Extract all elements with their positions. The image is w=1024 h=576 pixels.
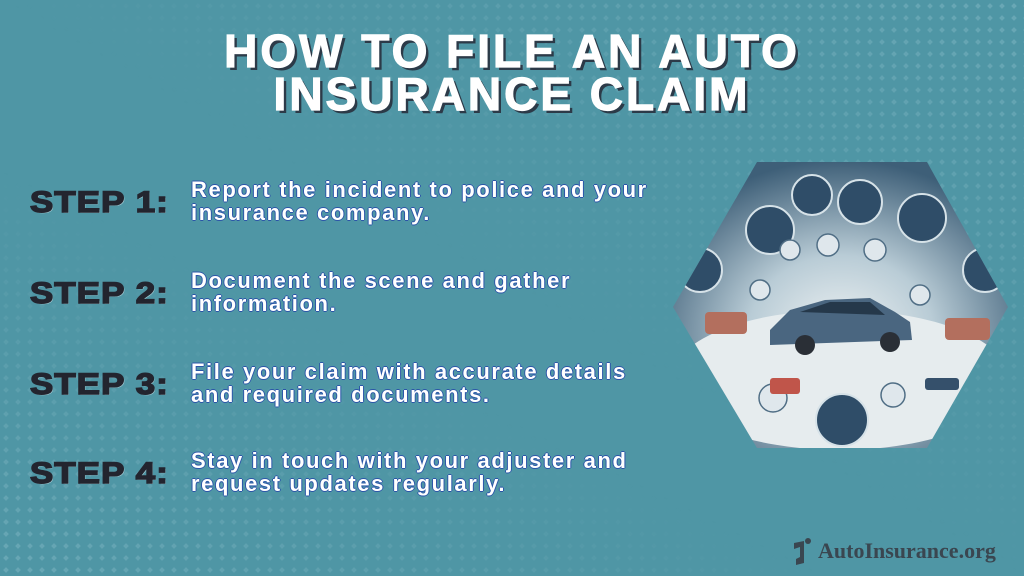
- title: HOW TO FILE AN AUTO: [224, 25, 800, 77]
- step 1: [30, 177, 648, 226]
- step 4: [30, 448, 628, 496]
- icon: logo mark: [794, 538, 811, 565]
- title: INSURANCE CLAIM: [274, 68, 750, 120]
- step 1: STEP 1:: [30, 186, 169, 219]
- step 3: STEP 3:: [30, 368, 169, 401]
- step 3: and required documents.: [191, 382, 491, 407]
- step 1: insurance company.: [191, 200, 431, 225]
- step 2: information.: [191, 291, 337, 316]
- logo: AutoInsurance.org: [818, 538, 996, 563]
- step 4: Stay in touch with your adjuster and: [191, 448, 628, 473]
- step 4: request updates regularly.: [191, 471, 506, 496]
- step 1: Report the incident to police and your: [191, 177, 648, 202]
- step 2: STEP 2:: [30, 277, 169, 310]
- title: [224, 25, 800, 120]
- step 2: Document the scene and gather: [191, 268, 571, 293]
- illustration: hexagon accident scene: [673, 162, 1008, 448]
- step 4: STEP 4:: [30, 457, 169, 490]
- step 3: [30, 359, 627, 408]
- step 3: File your claim with accurate details: [191, 359, 627, 384]
- step 2: [30, 268, 571, 316]
